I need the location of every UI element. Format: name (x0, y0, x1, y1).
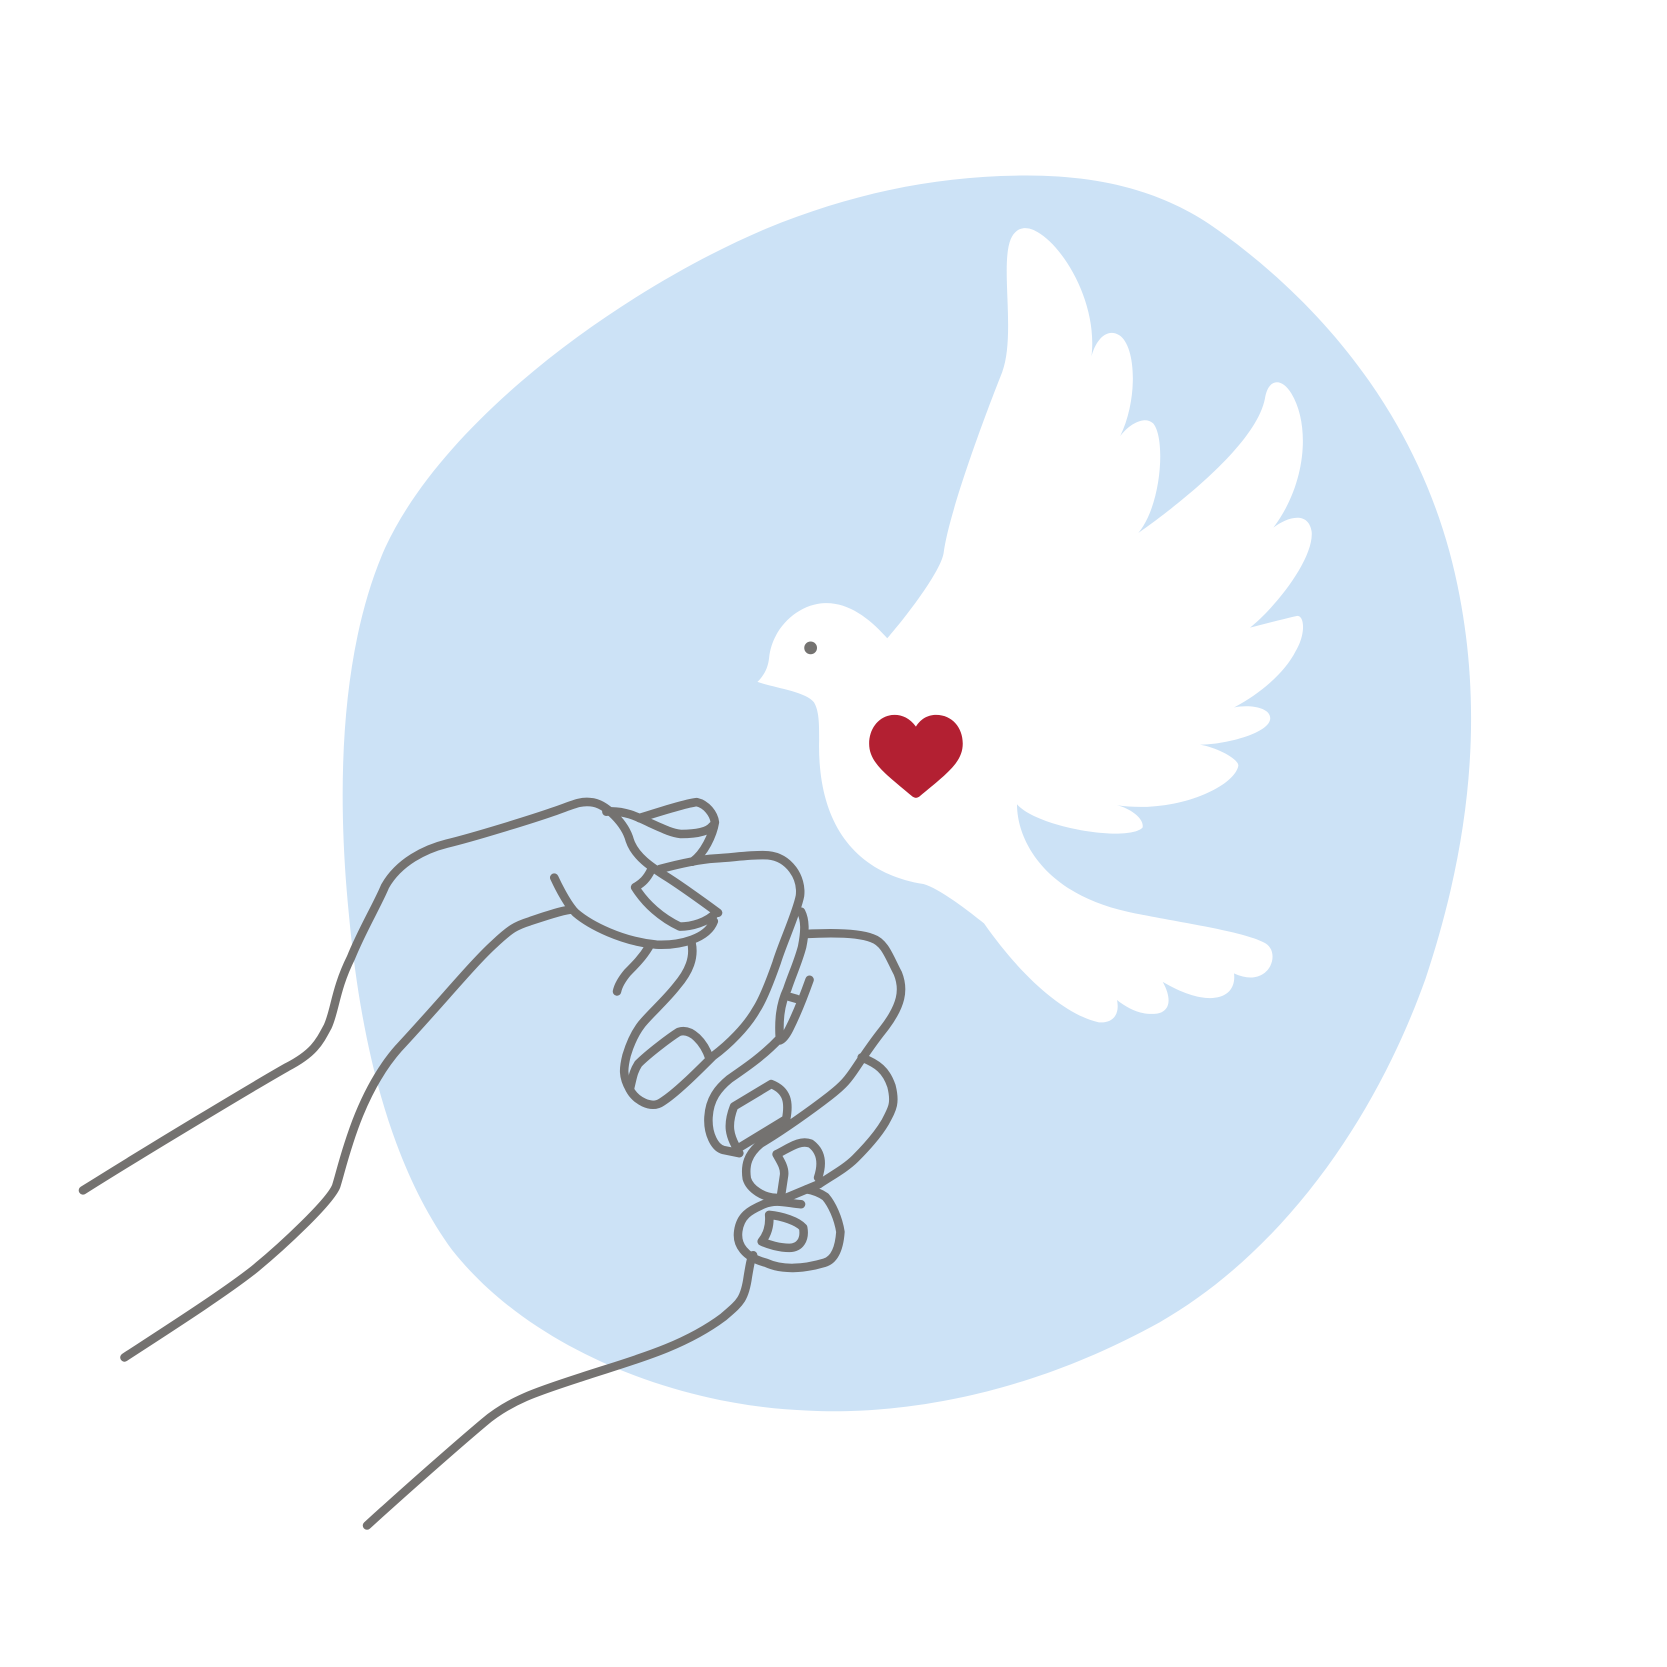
lower wrist line (124, 910, 572, 1357)
little finger (738, 1189, 840, 1268)
short finger line (780, 980, 810, 1040)
thumb tendon stroke (617, 947, 649, 991)
back of hand and index finger edge (83, 802, 718, 1190)
pinky outer (786, 1057, 893, 1198)
ring nail (730, 1084, 787, 1149)
pinky nail (777, 1142, 821, 1197)
ring finger outer edge (708, 912, 804, 1153)
thumb curve (554, 878, 714, 945)
background blue blob (343, 176, 1471, 1411)
middle finger (624, 855, 800, 1105)
small knuckle tick (789, 997, 797, 999)
index nail (639, 802, 715, 862)
dove body and wings (757, 228, 1312, 1022)
white dove (757, 228, 1312, 1022)
line-art hand (83, 802, 901, 1526)
thumb nail (635, 870, 716, 927)
index fingertip (606, 811, 713, 834)
ring finger top and underside (746, 933, 901, 1198)
dove eye (804, 641, 817, 654)
lower arm line (367, 1255, 753, 1526)
middle nail (630, 1031, 710, 1089)
red heart (869, 715, 963, 798)
little nail (762, 1215, 804, 1248)
